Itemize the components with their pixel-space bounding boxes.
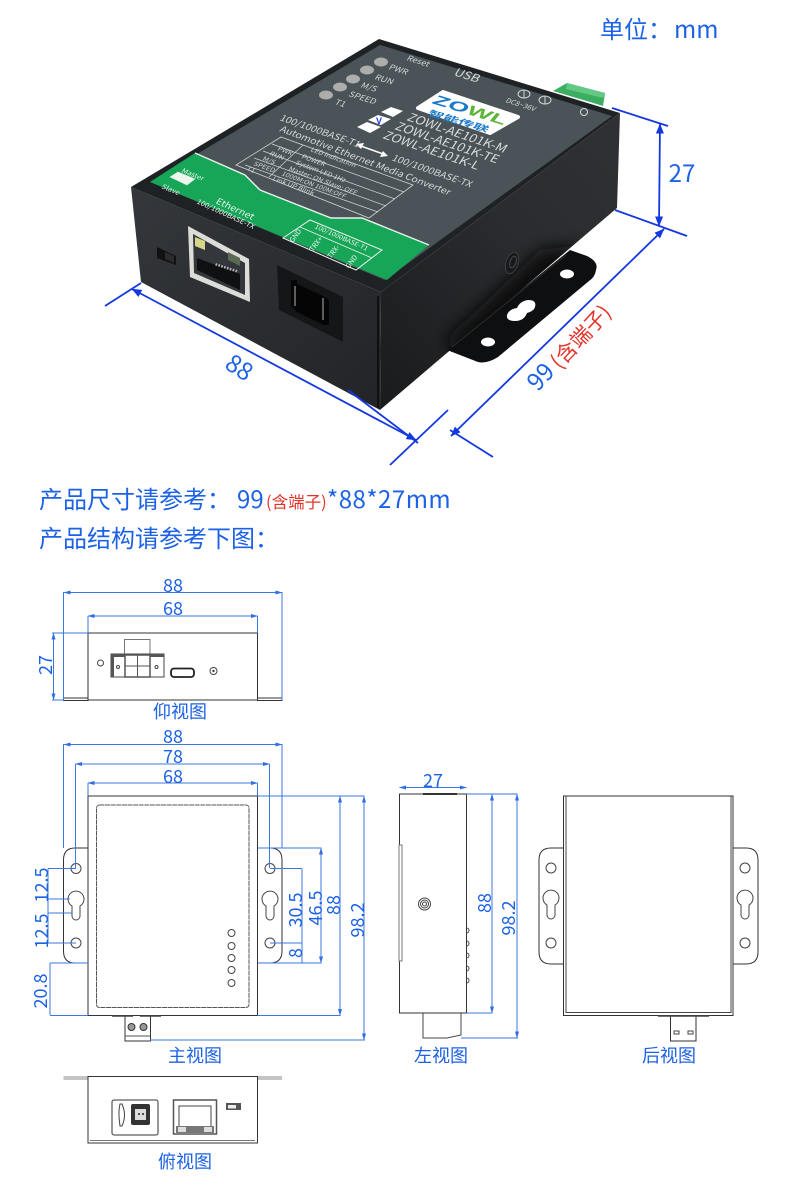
green band labels: Ethernet — [213, 194, 258, 222]
body — [400, 794, 466, 1013]
body — [88, 796, 258, 1016]
model names: ZOWL-AE101K-TE — [392, 117, 504, 167]
top face labels: SPEED — [346, 89, 379, 107]
LED indication table: 1000M:ON 100M:OFF — [280, 169, 349, 200]
right side face — [380, 113, 620, 410]
caption: 俯视图 — [158, 1148, 212, 1174]
left flange — [64, 848, 88, 963]
power symbols — [518, 90, 588, 116]
top face labels: DC8~36V — [503, 96, 539, 114]
label area — [96, 805, 249, 1008]
dimension labels: 27 — [423, 767, 443, 793]
structure heading: 产品结构请参考下图： — [39, 519, 279, 554]
logo — [418, 92, 518, 135]
dimension labels — [27, 723, 370, 1008]
back view — [539, 796, 758, 1068]
top strip — [423, 793, 457, 795]
model names: ZOWL-AE101K-M — [404, 108, 512, 156]
switch — [226, 1103, 241, 1110]
dimensions — [400, 788, 518, 1038]
dimensions — [52, 592, 282, 700]
flange line — [64, 1077, 282, 1079]
dimension labels: 88 — [471, 893, 497, 913]
dimension labels: 20.8 — [27, 974, 53, 1008]
green terminal block — [553, 83, 605, 106]
LEDs — [228, 930, 235, 986]
model checkboxes: V — [376, 116, 382, 126]
T1 terminal label box: GND — [287, 227, 304, 245]
master slave switch graphic — [170, 172, 195, 185]
flange shadow — [444, 240, 578, 353]
dimension labels: 12.5 — [28, 914, 54, 948]
LED indication table: PWR — [276, 144, 296, 157]
caption: 左视图 — [414, 1042, 468, 1068]
top face labels: Reset — [404, 53, 433, 70]
USB plug — [658, 1016, 709, 1041]
mounting flange — [447, 250, 597, 362]
T1 terminal label box: GND — [343, 253, 360, 271]
left flange — [539, 848, 564, 964]
top face labels: USB — [451, 64, 485, 86]
dimension labels: 8 — [282, 948, 308, 958]
dimension labels: 27 — [32, 655, 58, 675]
logo: ZOWL — [429, 93, 512, 128]
terminal side — [423, 1013, 461, 1038]
green band labels: Slave — [159, 182, 182, 198]
unit label: 单位： — [600, 10, 672, 45]
right flange — [258, 848, 282, 963]
T1 terminal label box: 100/1000BASE-T1 — [313, 222, 371, 253]
size heading: 产品尺寸请参考： — [39, 480, 231, 515]
LED indication table — [236, 137, 413, 218]
model names — [380, 108, 512, 173]
green band labels — [159, 166, 258, 232]
dimension labels: 68 — [163, 595, 183, 621]
green label band — [150, 153, 429, 280]
dimension 88 — [105, 283, 418, 443]
product description: 100/1000BASE-TX — [389, 151, 476, 190]
caption: 后视图 — [642, 1042, 696, 1068]
dimension labels: 12.5 — [28, 868, 54, 902]
dimension labels: 98.2 — [495, 901, 521, 935]
front view — [27, 723, 370, 1068]
dimension labels: 98.2 — [344, 903, 370, 937]
white band edge — [195, 153, 429, 245]
terminal block — [111, 640, 164, 677]
side screw — [503, 251, 521, 275]
dimension labels: 88 — [320, 895, 346, 915]
top face labels — [332, 53, 539, 114]
dimension labels: 78 — [163, 743, 183, 769]
mounting holes — [68, 864, 278, 948]
dimension labels: 88 — [163, 723, 183, 749]
mounting holes — [543, 863, 753, 948]
front face — [131, 187, 381, 410]
dimension 99 — [390, 229, 664, 465]
reset button — [210, 668, 217, 674]
LED indication table: POWER — [300, 152, 329, 168]
dimension labels: 68 — [163, 763, 183, 789]
dimension 88: 88 — [220, 344, 261, 388]
top face labels: T1 — [332, 97, 349, 110]
product description: Automotive Ethernet Media Converter — [277, 122, 455, 198]
dimension 99: 99 — [517, 354, 561, 397]
size heading: *88*27mm — [327, 480, 451, 515]
body — [564, 796, 733, 1016]
size heading: (含端子) — [266, 489, 327, 513]
logo: 智能传联 — [425, 106, 493, 135]
product description: 100/1000BASE-T1 — [277, 111, 364, 150]
bottom-up view — [32, 572, 282, 724]
T1 port — [277, 265, 343, 342]
top-down view — [64, 1076, 282, 1174]
LED bumps — [466, 928, 469, 983]
left view — [399, 767, 521, 1068]
LED indication table: T1 — [245, 164, 258, 174]
caption: 主视图 — [168, 1042, 222, 1068]
dimension labels: 88 — [163, 572, 183, 598]
device photo — [105, 39, 695, 465]
body and flange — [64, 633, 282, 700]
LED indication table: System LED 1Hz — [294, 158, 348, 184]
LED indication table: LED indication — [309, 145, 359, 169]
dimensions — [48, 744, 365, 1040]
T1 terminal label box — [283, 220, 382, 271]
LED indication table: Link UP Blink — [271, 174, 317, 197]
dimension labels: 30.5 — [282, 893, 308, 927]
dimension 27 — [612, 108, 695, 236]
USB-C port — [171, 668, 194, 677]
RJ45 port — [188, 226, 250, 302]
dimension labels — [32, 572, 183, 675]
green band labels: Master — [179, 166, 206, 183]
hole — [98, 660, 104, 666]
right flange — [733, 848, 758, 964]
dimension labels: 46.5 — [302, 891, 328, 925]
green band labels: 100/1000BASE-TX — [194, 198, 257, 232]
LED indication table: Master: ON Slave: OFF — [287, 164, 360, 197]
dimension labels — [423, 767, 521, 935]
unit label: mm — [674, 10, 718, 45]
T1 terminal label box: TRX- — [325, 242, 343, 261]
front switch — [157, 247, 176, 265]
T1 terminal label box: TRX+ — [307, 235, 325, 254]
top face labels: PWR — [386, 62, 412, 77]
dimension 99: (含端子) — [543, 298, 618, 375]
model checkboxes — [357, 107, 403, 133]
top face labels: M/S — [358, 80, 380, 94]
body — [88, 1076, 258, 1143]
LED indication table: SPEED — [252, 159, 278, 174]
dimension 27: 27 — [669, 154, 695, 189]
LED indication table: M/S — [261, 154, 278, 166]
side plate — [399, 845, 402, 961]
top face labels: RUN — [372, 72, 397, 87]
status LEDs — [319, 58, 388, 100]
LED indication table: RUN — [268, 149, 287, 162]
USB-B port — [112, 1100, 158, 1135]
model names: ZOWL-AE101K-L — [380, 126, 485, 173]
size heading: 99 — [237, 480, 264, 515]
double arrow — [356, 143, 388, 157]
corner seam — [377, 296, 379, 408]
top face — [131, 39, 620, 292]
caption: 仰视图 — [153, 698, 207, 724]
screw — [418, 898, 430, 910]
RJ45 port — [174, 1100, 216, 1134]
terminal — [112, 1016, 161, 1041]
top label panel — [150, 45, 612, 280]
